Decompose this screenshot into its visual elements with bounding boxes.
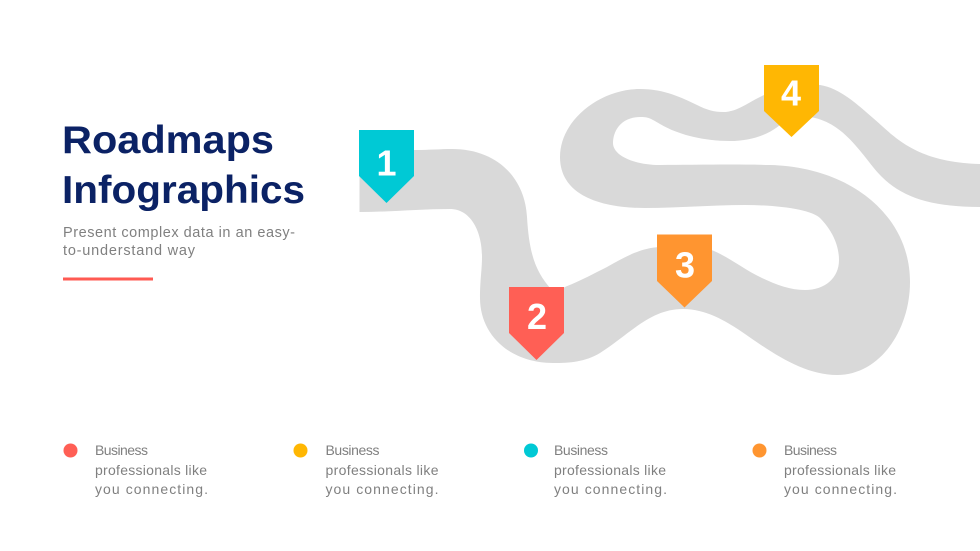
title underline xyxy=(63,278,153,280)
title: Infographics xyxy=(62,169,305,212)
legend item 2: you connecting. xyxy=(326,481,438,497)
title xyxy=(62,119,305,212)
marker 4: 4 xyxy=(781,72,801,114)
winding road xyxy=(360,85,980,375)
legend item 1 xyxy=(64,442,208,497)
legend item 3: Business xyxy=(554,442,608,458)
subtitle: to-understand way xyxy=(63,243,196,259)
legend item 4: professionals like xyxy=(784,462,896,478)
marker 3 xyxy=(657,234,712,308)
legend item 2: Business xyxy=(326,442,380,458)
marker 2 xyxy=(509,287,564,360)
marker 4 xyxy=(764,65,819,137)
marker 2: 2 xyxy=(527,296,547,337)
legend item 1: professionals like xyxy=(95,462,207,478)
subtitle xyxy=(63,225,295,259)
marker 3: 3 xyxy=(675,244,695,286)
legend item 3 xyxy=(524,442,667,497)
marker 1 xyxy=(359,130,414,203)
title: Roadmaps xyxy=(62,119,274,162)
legend item 2 xyxy=(294,442,439,497)
legend item 4 xyxy=(752,442,897,497)
subtitle: Present complex data in an easy- xyxy=(63,225,295,241)
legend item 4: Business xyxy=(784,442,837,458)
legend item 3: you connecting. xyxy=(554,481,667,497)
legend item 1: Business xyxy=(95,442,148,458)
marker 1: 1 xyxy=(376,142,397,184)
legend item 4: you connecting. xyxy=(784,481,897,497)
legend item 2: professionals like xyxy=(326,462,439,478)
legend item 3: professionals like xyxy=(554,462,666,478)
legend item 1: you connecting. xyxy=(95,481,208,497)
